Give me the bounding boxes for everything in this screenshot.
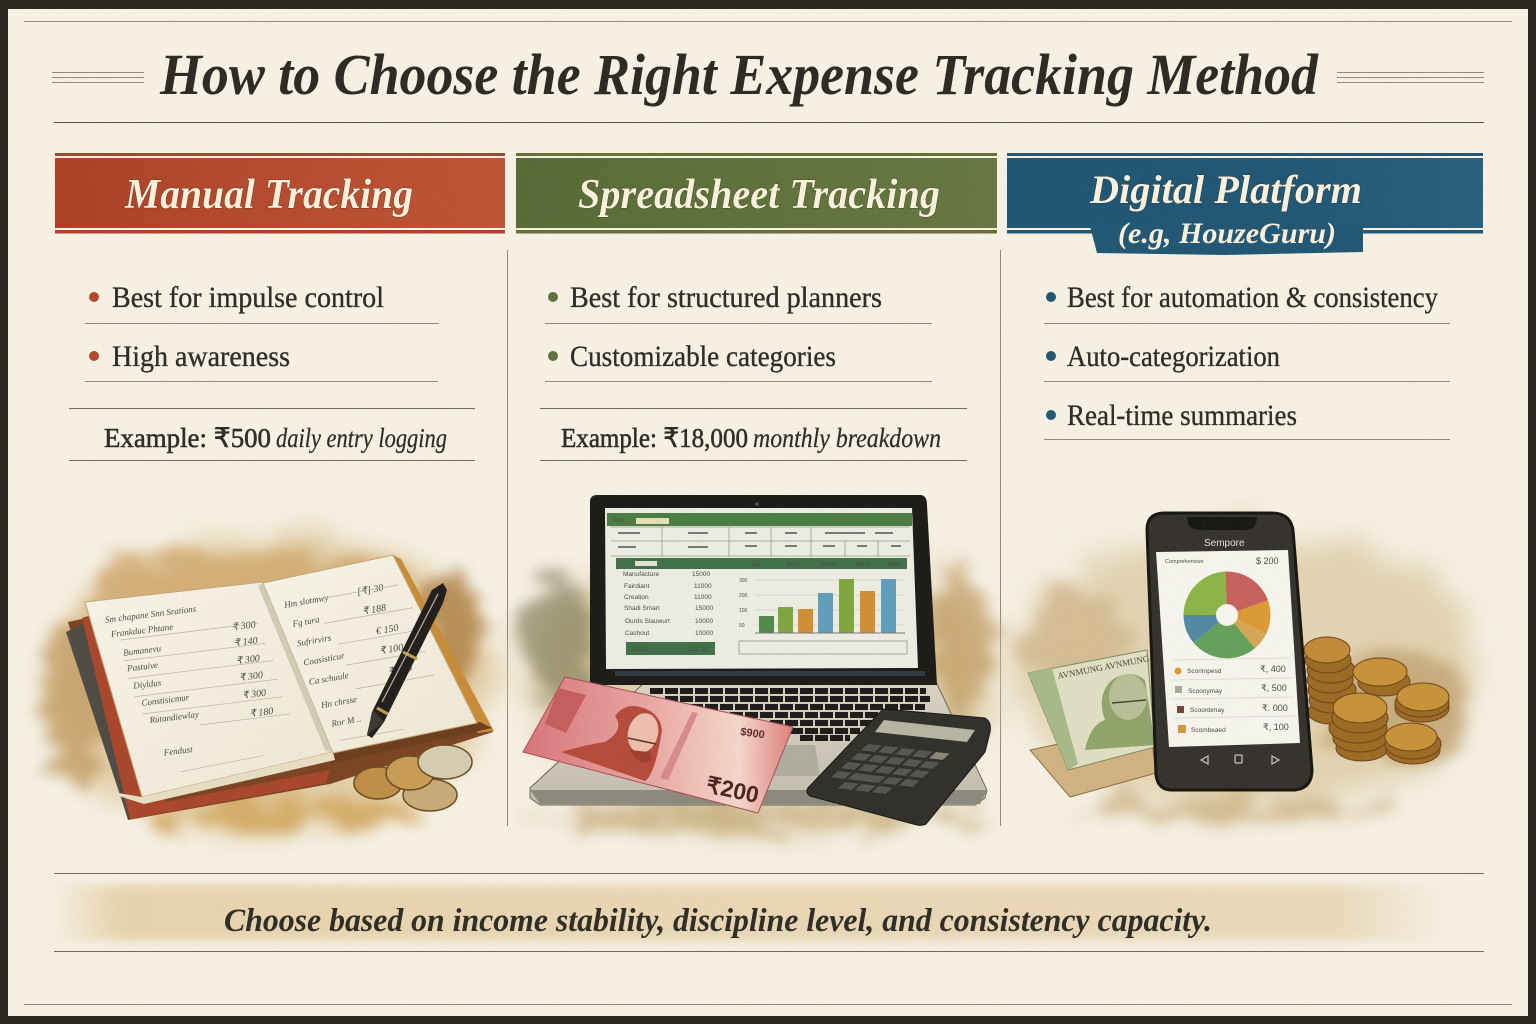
ledger entries right: Fg tura: [291, 614, 321, 629]
phone expense list: Scorimpesd: [1187, 668, 1222, 675]
notebook cover: [68, 557, 493, 820]
ledger entries right: ₹ 380: [388, 663, 413, 678]
phone expense list: Scoonymay: [1188, 688, 1223, 695]
ledger entries left: Constisicmur: [141, 692, 190, 708]
ledger entries right: Sufrirvirs: [296, 632, 332, 648]
ledger entries right: Coasisticur: [303, 650, 346, 667]
spreadsheet total button: 131 00: [688, 646, 708, 653]
ledger entries left: Rutandiewlay: [148, 709, 199, 725]
rupee banknote: [523, 677, 793, 813]
notebook right page: [263, 555, 477, 753]
spreadsheet rows: Cashout: [625, 630, 649, 637]
header: Digital Platform: (e.g, HouzeGuru): [1118, 217, 1336, 250]
illustration: phone, banknotes and coin stacks: [1013, 513, 1477, 822]
bar chart: [739, 578, 907, 654]
pie chart: [1184, 571, 1270, 658]
pen: [367, 583, 447, 738]
spreadsheet top bar: [607, 513, 912, 526]
spreadsheet band: Month: [856, 562, 871, 568]
phone expense list: ₹, 500: [1261, 683, 1287, 693]
ledger entries left: ₹ 140: [233, 635, 258, 649]
ledger entries right: Hn chrsse: [319, 694, 358, 710]
rupee banknote: ₹200: [704, 771, 761, 808]
spreadsheet rows: [623, 571, 713, 637]
spreadsheet rows: 10000: [695, 618, 713, 625]
column 3 points: Best for automation & consistency: [1067, 281, 1438, 314]
column 2 points: [545, 281, 932, 382]
ledger entries right: Ca schuule: [308, 670, 349, 687]
spreadsheet band: Rate: [888, 562, 900, 568]
header: Manual Tracking: [55, 153, 505, 234]
spreadsheet band: March: [786, 562, 801, 568]
ledger entries right: ₹ 100: [379, 642, 404, 657]
ledger entries right: [₹] 30: [356, 583, 384, 598]
brown banknote: [1030, 725, 1156, 797]
ledger entries left: [104, 594, 295, 779]
column 2 example: monthly breakdown: [753, 423, 941, 453]
ledger entries left: Frankduc Phtane: [109, 622, 174, 639]
green banknote: AVNMUNG AVNMUNG: [1056, 653, 1151, 681]
spreadsheet rows: Shadi Smart: [624, 605, 660, 612]
diffuse halo: notebook: [48, 535, 492, 835]
diffuse halo: laptop: [528, 530, 992, 830]
ledger entries left: ₹ 300: [242, 688, 267, 702]
spreadsheet rows: 11000: [694, 594, 712, 601]
header: Spreadsheet Tracking: [516, 153, 997, 234]
spreadsheet total button: [626, 642, 715, 655]
header: Manual Tracking: Manual Tracking: [124, 172, 413, 218]
header: Spreadsheet Tracking: Spreadsheet Tracking: [578, 172, 940, 218]
column 3 points: Auto-categorization: [1067, 340, 1280, 373]
column 1 example: daily entry logging: [276, 423, 447, 453]
spreadsheet rows: 10000: [695, 630, 713, 637]
phone expense list: [1172, 658, 1296, 734]
illustration: notebook, pen and coins: [43, 535, 494, 835]
phone expense list: ₹, 400: [1260, 664, 1286, 674]
notebook left page: [85, 582, 333, 797]
spreadsheet rows: Manufacture: [623, 571, 660, 578]
spreadsheet band: Jan: [751, 562, 760, 568]
spreadsheet table grid: [610, 527, 910, 557]
ledger entries left: Pastuive: [126, 660, 159, 674]
laptop base: [530, 684, 987, 805]
illustration: laptop, banknote and calculator: [523, 495, 994, 830]
title: How to Choose the Right Expense Tracking Method: [159, 42, 1319, 107]
phone body: [1147, 513, 1312, 790]
ledger entries right: Ror M ..: [330, 713, 362, 729]
column 1 example: [69, 408, 475, 460]
spreadsheet band: Month: [822, 562, 837, 568]
spreadsheet rows: Ourds Slauwurt: [625, 618, 670, 625]
column 3 points: Real-time summaries: [1067, 399, 1297, 432]
coins: [354, 745, 472, 811]
ledger entries right: [282, 576, 443, 746]
column 1 points: Best for impulse control: [112, 281, 384, 314]
header: Digital Platform: [1007, 153, 1483, 255]
footer band: [50, 885, 1450, 941]
spreadsheet rows: 15000: [692, 571, 710, 578]
watercolor wash: laptop: [526, 565, 994, 829]
column 2 points: Best for structured planners: [570, 281, 882, 314]
spreadsheet rows: 11000: [694, 583, 712, 590]
header: Digital Platform: Digital Platform: [1089, 167, 1362, 212]
phone status text: [1165, 538, 1279, 566]
bar chart: 50: [739, 623, 745, 629]
green banknote: [1028, 650, 1155, 770]
ledger entries right: Hm slotmwy: [282, 592, 329, 610]
spreadsheet top bar: Sum: [612, 518, 624, 524]
bar chart: 100: [739, 608, 748, 614]
bar chart: 300: [739, 578, 748, 584]
ledger entries left: Fendust: [162, 744, 194, 758]
watercolor wash: notebook: [43, 548, 480, 826]
ledger entries left: ₹ 300: [235, 653, 260, 667]
ledger entries left: ₹ 180: [249, 706, 274, 720]
laptop screen bezel: [590, 495, 937, 685]
phone status text: $ 200: [1256, 556, 1279, 566]
ledger entries left: Sm chapane Snn Srations: [104, 604, 197, 625]
ledger entries left: Diyldus: [132, 677, 162, 691]
spreadsheet screen: [605, 508, 918, 669]
phone status text: Comprehensive: [1165, 559, 1204, 565]
diffuse halo: phone: [1013, 530, 1477, 810]
phone expense list: Scombeaed: [1191, 727, 1226, 734]
calculator: [807, 709, 990, 825]
touchpad: [752, 745, 820, 776]
column 1 points: [85, 281, 439, 382]
ledger entries left: Bumanevu: [123, 643, 162, 658]
column 1 points: High awareness: [112, 340, 290, 373]
watercolor wash: phone: [1020, 590, 1467, 822]
phone screen: [1156, 550, 1300, 747]
ledger entries left: ₹ 300: [231, 619, 256, 633]
phone expense list: Scoonbmay: [1190, 707, 1225, 714]
spreadsheet rows: Creation: [624, 594, 649, 601]
column 3 points: [1044, 281, 1450, 440]
column 2 points: Customizable categories: [570, 340, 836, 373]
footer message: Choose based on income stability, discipline level, and consistency capacity.: [224, 903, 1212, 939]
ledger entries left: ₹ 300: [239, 670, 264, 684]
phone notch: [1187, 517, 1257, 530]
column 1 example: Example: ₹500: [104, 423, 271, 453]
bar chart: 200: [739, 593, 748, 599]
phone nav buttons: [1201, 755, 1279, 764]
spreadsheet rows: 15000: [695, 605, 713, 612]
keyboard: [650, 691, 930, 738]
column 2 example: [540, 408, 967, 460]
coin stacks: [1304, 637, 1449, 764]
phone expense list: ₹, 100: [1263, 722, 1289, 732]
rupee banknote: $900: [740, 726, 765, 741]
spreadsheet total button: TOTAL: [630, 646, 651, 653]
ledger entries right: ₹ 188: [362, 602, 387, 617]
phone status text: Sempore: [1204, 538, 1245, 549]
spreadsheet band: [616, 558, 907, 569]
spreadsheet rows: Fairdiant: [624, 583, 649, 590]
phone expense list: ₹. 000: [1262, 703, 1288, 713]
column 2 example: Example: ₹18,000: [561, 423, 748, 453]
ledger entries right: € 150: [375, 623, 399, 637]
